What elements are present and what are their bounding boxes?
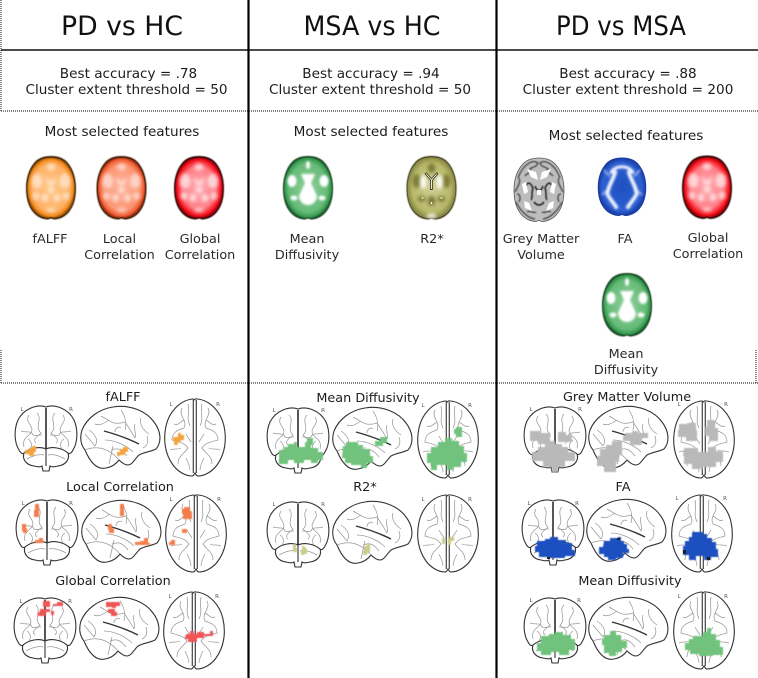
label: local correlation: Local <box>103 232 136 247</box>
glass brain: mean diffusivity: L <box>529 598 533 604</box>
glass brain: global correlation: R <box>215 594 219 600</box>
heading: fALFF glass brain: fALFF <box>105 390 141 405</box>
label: mean diffusivity: Diffusivity <box>275 248 340 263</box>
text: MSA vs HC accuracy and threshold: Best accuracy = .94 <box>302 66 440 82</box>
icon: fALFF brain slice <box>26 156 76 220</box>
glass brain: mean diffusivity: R <box>468 403 472 409</box>
glass brain: R2*: L <box>421 497 425 503</box>
glass brain: grey matter volume: L <box>529 407 533 413</box>
text: MSA vs HC accuracy and threshold: Cluster extent threshold = 50 <box>269 82 471 98</box>
glass brain: grey matter volume <box>524 401 734 478</box>
panel: MSA vs HC <box>267 11 478 572</box>
icon: FA brain slice <box>598 158 646 216</box>
icon: mean diffusivity brain slice <box>283 156 333 220</box>
glass brain: R2*: R <box>321 502 325 508</box>
heading: PD vs MSA: PD vs MSA <box>556 11 686 42</box>
glass brain: mean diffusivity: L <box>272 408 276 414</box>
heading: PD vs HC: PD vs HC <box>61 11 183 42</box>
label: mean diffusivity: Diffusivity <box>594 363 659 378</box>
glass brain: mean diffusivity: R <box>577 598 581 604</box>
glass brain: fALFF: L <box>169 402 173 408</box>
icon: global correlation brain slice <box>682 156 732 219</box>
glass brain: fALFF: R <box>216 402 220 408</box>
glass brain: FA: L <box>527 501 531 507</box>
subheading: most selected features: Most selected features <box>45 124 199 140</box>
label: R2*: R2* <box>420 232 444 247</box>
glass brain: fALFF <box>15 399 225 476</box>
glass brain: mean diffusivity: L <box>677 594 681 600</box>
glass brain: R2*: R <box>468 497 472 503</box>
glass brain: FA <box>522 495 732 572</box>
glass brain: R2*: L <box>272 502 276 508</box>
label: global correlation: Global <box>688 231 728 246</box>
glass brain: global correlation <box>14 592 224 669</box>
label: mean diffusivity: Mean <box>290 232 324 247</box>
label: FA: FA <box>618 232 633 247</box>
glass brain: local correlation: L <box>21 501 25 507</box>
glass brain: global correlation: L <box>19 599 23 605</box>
text: PD vs HC accuracy and threshold: Best accuracy = .78 <box>60 66 197 82</box>
glass brain: local correlation: R <box>217 497 221 503</box>
label: grey matter volume: Volume <box>517 248 565 263</box>
label: mean diffusivity: Mean <box>609 347 643 362</box>
glass brain: local correlation: L <box>169 497 173 503</box>
label: global correlation: Global <box>180 232 220 247</box>
glass brain: grey matter volume: L <box>677 402 681 408</box>
glass brain: mean diffusivity: R <box>321 408 325 414</box>
heading: FA glass brain: FA <box>616 480 631 495</box>
glass brain: mean diffusivity: L <box>421 403 425 409</box>
label: fALFF: fALFF <box>32 232 68 247</box>
glass brain: FA: R <box>575 501 579 507</box>
glass brain: grey matter volume: R <box>578 407 582 413</box>
glass brain: local correlation: R <box>69 501 73 507</box>
heading: grey matter volume glass brain: Grey Matter Volume <box>563 390 691 405</box>
icon: global correlation brain slice <box>174 156 224 220</box>
heading: mean diffusivity glass brain: Mean Diffusivity <box>316 391 420 406</box>
heading: MSA vs HC: MSA vs HC <box>304 11 440 42</box>
icon: grey matter volume brain slice <box>514 158 564 222</box>
panel: PD vs HC <box>14 11 235 669</box>
glass brain: local correlation <box>16 495 226 572</box>
glass brain: global correlation: R <box>68 599 72 605</box>
glass brain: FA: L <box>675 496 679 502</box>
heading: R2* glass brain: R2* <box>353 480 377 495</box>
label: global correlation: Correlation <box>165 248 235 263</box>
label: global correlation: Correlation <box>673 247 743 262</box>
heading: local correlation glass brain: Local Correlation <box>66 480 174 495</box>
heading: global correlation glass brain: Global Correlation <box>55 574 171 589</box>
label: grey matter volume: Grey Matter <box>503 232 580 247</box>
glass brain: grey matter volume: R <box>724 402 728 408</box>
text: PD vs MSA accuracy and threshold: Best accuracy = .88 <box>559 66 697 82</box>
label: local correlation: Correlation <box>84 248 155 263</box>
subheading: most selected features: Most selected features <box>549 128 703 144</box>
glass brain: FA: R <box>723 496 727 502</box>
glass brain: global correlation: L <box>168 594 172 600</box>
subheading: most selected features: Most selected features <box>294 124 448 140</box>
text: PD vs MSA accuracy and threshold: Cluster extent threshold = 200 <box>523 82 733 98</box>
glass brain: mean diffusivity <box>267 401 478 478</box>
glass brain: R2* <box>267 495 478 572</box>
heading: mean diffusivity glass brain: Mean Diffusivity <box>578 574 682 589</box>
glass brain: fALFF: R <box>69 407 73 413</box>
icon: mean diffusivity brain slice <box>602 273 652 336</box>
panel: PD vs MSA <box>503 11 743 669</box>
icon: local correlation brain slice <box>96 156 146 220</box>
glass brain: mean diffusivity <box>524 592 734 669</box>
icon: R2* brain slice <box>406 156 456 220</box>
glass brain: fALFF: L <box>20 407 24 413</box>
text: PD vs HC accuracy and threshold: Cluster extent threshold = 50 <box>25 82 228 98</box>
glass brain: mean diffusivity: R <box>724 594 728 600</box>
